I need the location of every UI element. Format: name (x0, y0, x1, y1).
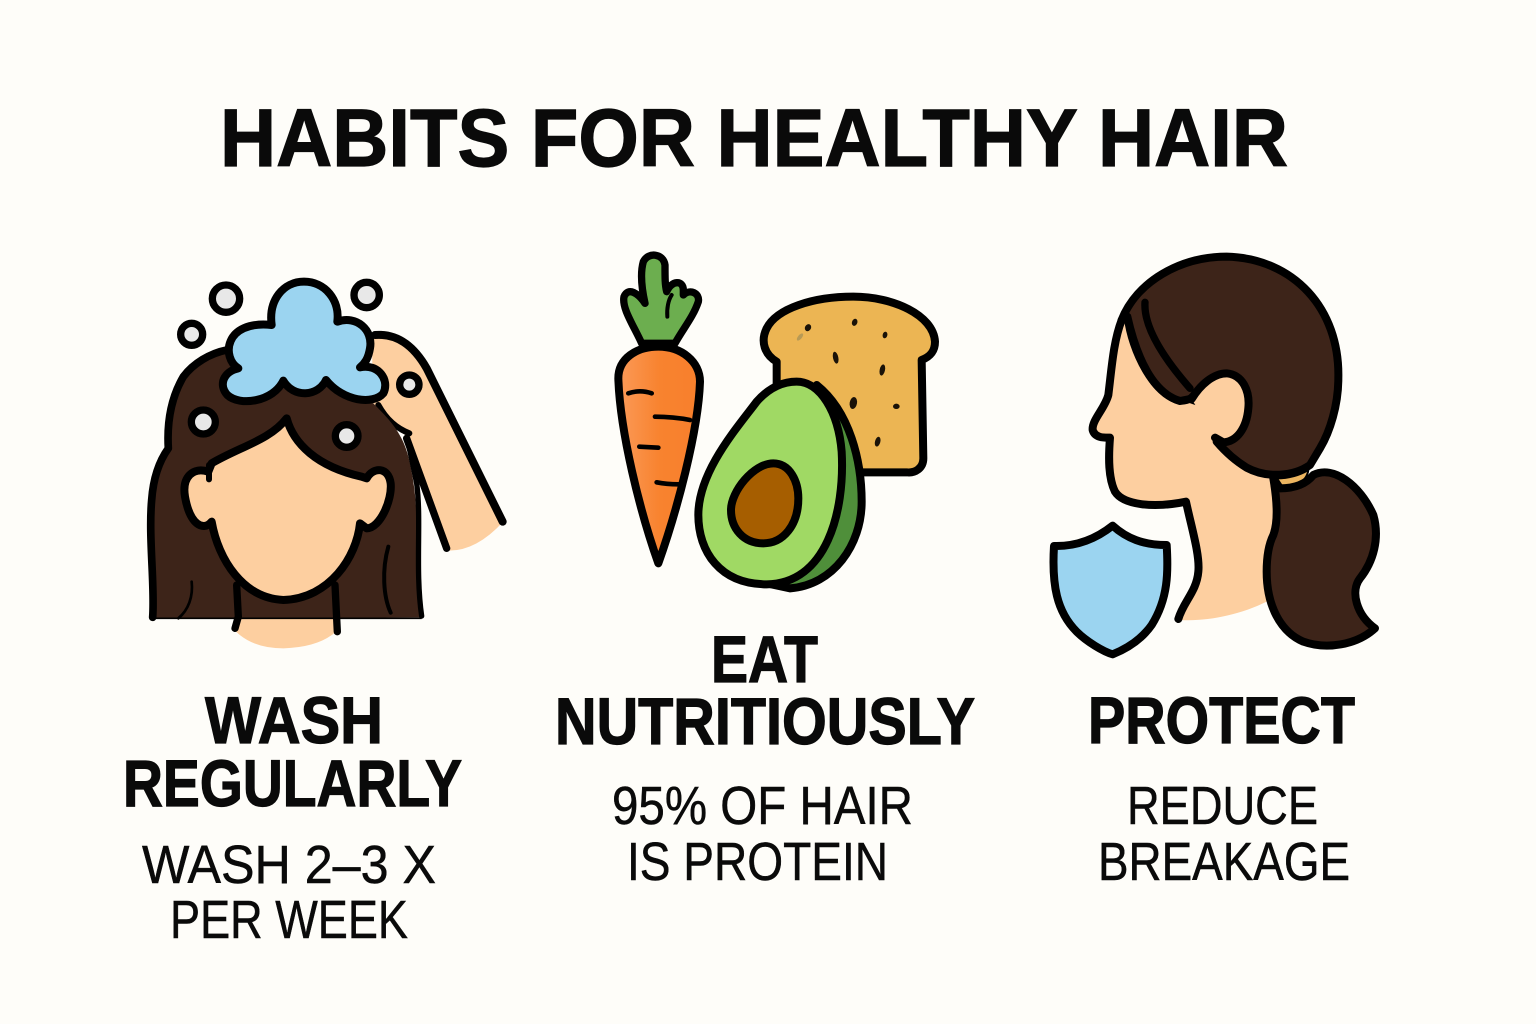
icon: protected profile (1053, 257, 1376, 654)
text: protein fact: IS PROTEIN (627, 832, 888, 892)
text: reduce breakage (1098, 776, 1350, 892)
face (184, 418, 391, 600)
text: wash frequency (142, 835, 436, 950)
text: wash frequency: PER WEEK (170, 890, 408, 950)
ear (1192, 373, 1249, 442)
heading: eat nutritiously: EAT (711, 622, 818, 696)
title: HABITS FOR HEALTHY HAIR (220, 93, 1288, 184)
text: protein fact (612, 776, 913, 892)
neck and face (1093, 320, 1275, 620)
heading: wash regularly (123, 683, 462, 820)
icon: washing hair (150, 282, 503, 648)
heading: eat nutritiously (555, 622, 975, 758)
hair tie (1277, 470, 1308, 487)
heading: wash regularly: REGULARLY (123, 746, 462, 820)
neck (236, 583, 334, 648)
text: reduce breakage: REDUCE (1127, 776, 1318, 836)
carrot (618, 255, 700, 563)
shield (1053, 526, 1167, 654)
ponytail (1267, 472, 1376, 646)
icon: nutritious food (618, 255, 935, 588)
text: protein fact: 95% OF HAIR (612, 776, 913, 836)
text: wash frequency: WASH 2–3 X (142, 835, 436, 895)
heading: eat nutritiously: NUTRITIOUSLY (555, 684, 975, 758)
hair (1122, 257, 1338, 475)
hair (150, 350, 422, 632)
heading: wash regularly: WASH (205, 683, 383, 757)
bubbles (181, 282, 419, 447)
avocado (698, 382, 862, 588)
hair strands (1127, 302, 1195, 401)
face outline (1093, 320, 1199, 619)
text: reduce breakage: BREAKAGE (1098, 832, 1350, 892)
arm and hand (372, 335, 503, 551)
foam (223, 282, 385, 401)
bread (764, 297, 935, 472)
heading: protect: PROTECT (1088, 683, 1355, 757)
